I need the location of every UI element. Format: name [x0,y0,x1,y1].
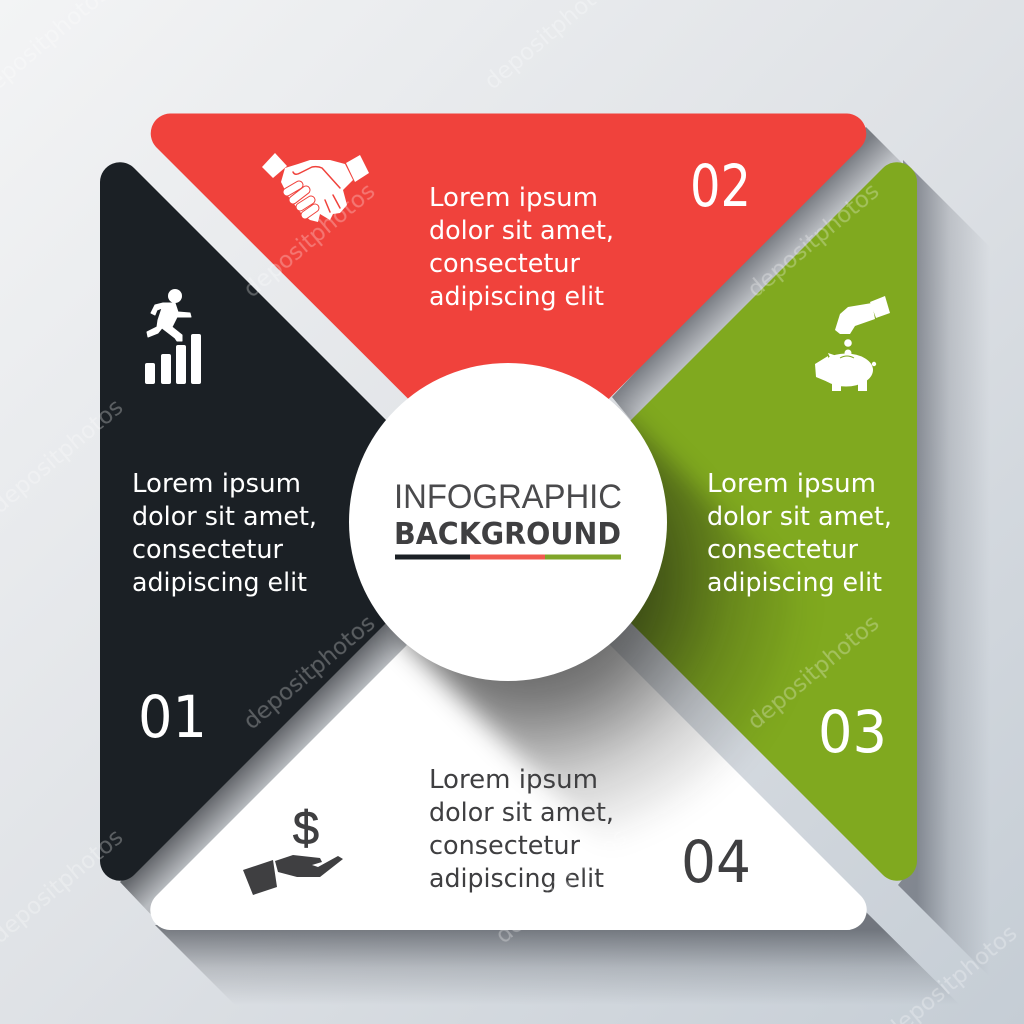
icon: hand dropping coin in piggy bank [815,296,890,391]
text block: panel 01: Lorem ipsum [132,469,301,499]
text block: panel 04 [429,765,614,894]
text block: panel 01 [132,469,317,598]
icon: runner on rising bars [145,289,201,384]
text block: panel 04: Lorem ipsum [429,765,598,795]
text block: panel 04: consectetur [429,831,581,861]
text block: panel 03 [707,469,892,598]
title: BACKGROUND [394,517,621,552]
text block: panel 03: adipiscing elit [707,568,882,598]
text block: panel 02 [429,183,614,312]
panel 04: white triangle [150,544,867,930]
text block: panel 04: adipiscing elit [429,864,604,894]
number 04: 04 [681,828,751,896]
number 02: 02 [690,152,751,220]
panel 03: green triangle [530,162,917,881]
title [394,478,622,552]
text block: panel 01: consectetur [132,535,284,565]
text block: panel 01: dolor sit amet, [132,502,317,532]
watermarks: depositphotos [743,178,884,303]
center circle cast shadow [396,410,920,934]
long shadows [120,127,990,1010]
panel 02: red triangle [151,114,866,499]
watermarks: depositphotos [743,610,884,735]
icon: hand holding dollar sign [243,801,343,895]
text block: panel 03: consectetur [707,535,859,565]
number 01: 01 [138,683,207,751]
icon: handshake [262,153,369,222]
watermarks: depositphotos [239,178,380,303]
text block: panel 02: consectetur [429,249,581,279]
text block: panel 01: adipiscing elit [132,568,307,598]
watermarks: depositphotos [491,824,632,949]
title: INFOGRAPHIC [394,478,622,516]
number 03: 03 [818,698,887,766]
watermarks: depositphotos [239,610,380,735]
text block: panel 02: adipiscing elit [429,282,604,312]
text block: panel 02: Lorem ipsum [429,183,598,213]
text block: panel 03: dolor sit amet, [707,502,892,532]
text block: panel 03: Lorem ipsum [707,469,876,499]
center circle [349,363,667,681]
icon: hand holding dollar sign: $ [293,801,319,854]
panel 01: black triangle [100,162,488,881]
text block: panel 02: dolor sit amet, [429,216,614,246]
text block: panel 04: dolor sit amet, [429,798,614,828]
tri-colour underline [395,554,621,560]
